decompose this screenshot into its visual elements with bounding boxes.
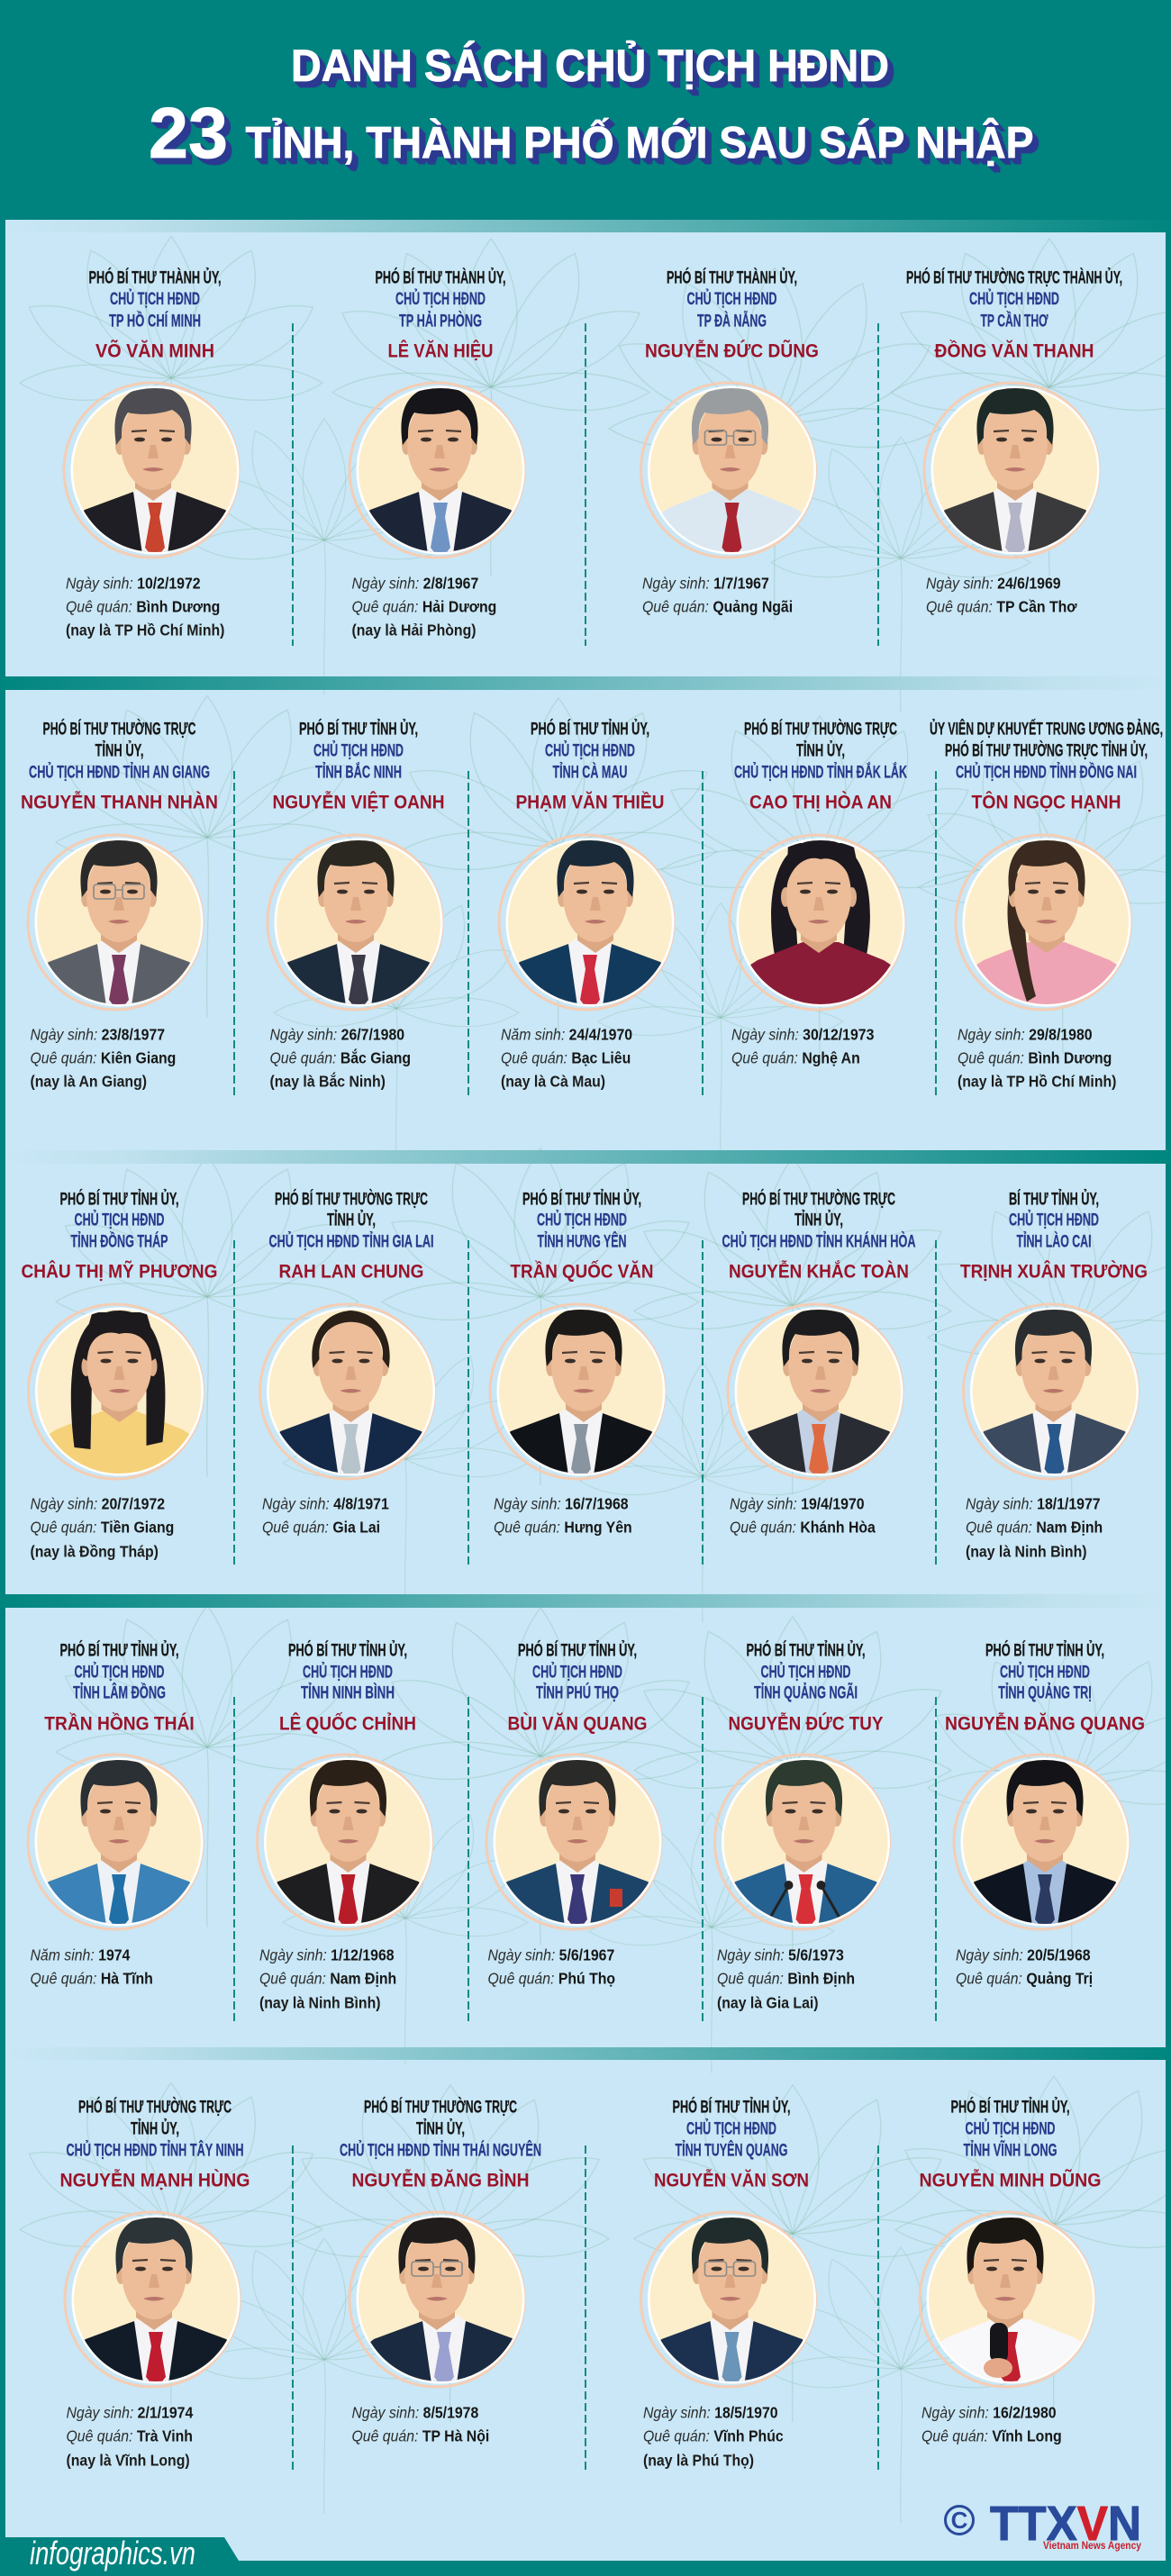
role: CHỦ TỊCH HĐND TỈNH TÂY NINH bbox=[67, 2140, 243, 2160]
role: CHỦ TỊCH HĐND bbox=[1000, 1663, 1090, 1683]
role: PHÓ BÍ THƯ TỈNH ỦY, bbox=[59, 1641, 178, 1661]
name: TRẦN HỒNG THÁI bbox=[44, 1713, 195, 1735]
role: CHỦ TỊCH HĐND bbox=[74, 1663, 164, 1683]
details: Năm sinh: 24/4/1970 bbox=[501, 1026, 632, 1044]
portrait bbox=[955, 834, 1131, 1011]
portrait bbox=[27, 1753, 204, 1931]
details: Quê quán: Bình Dương bbox=[958, 1049, 1112, 1067]
details: Quê quán: TP Cần Thơ bbox=[926, 598, 1077, 616]
role: TỈNH ỦY, bbox=[327, 1211, 376, 1230]
role: PHÓ BÍ THƯ THƯỜNG TRỰC bbox=[742, 1189, 895, 1209]
card: Nguyễn Mạnh Hùng bbox=[57, 2097, 255, 2470]
details: Quê quán: Hải Dương bbox=[351, 598, 496, 616]
details: Ngày sinh: 8/5/1978 bbox=[351, 2404, 478, 2422]
details: Ngày sinh: 29/8/1980 bbox=[958, 1026, 1093, 1044]
card: Nguyễn Đức Dũng bbox=[632, 268, 831, 616]
name: RAH LAN CHUNG bbox=[279, 1261, 423, 1283]
role bbox=[67, 2097, 243, 2160]
name: LÊ QUỐC CHỈNH bbox=[279, 1713, 416, 1735]
name: NGUYỄN ĐỨC TUY bbox=[728, 1713, 883, 1735]
role: PHÓ BÍ THƯ THƯỜNG TRỰC bbox=[275, 1189, 428, 1209]
portrait bbox=[256, 1753, 433, 1931]
details bbox=[270, 1026, 411, 1091]
role bbox=[340, 2097, 541, 2160]
role: TỈNH CÀ MAU bbox=[553, 762, 627, 782]
role bbox=[951, 2097, 1070, 2160]
role: PHÓ BÍ THƯ THÀNH ỦY, bbox=[667, 268, 797, 288]
details bbox=[966, 1495, 1103, 1561]
role bbox=[268, 1189, 434, 1252]
role bbox=[734, 719, 907, 782]
role: CHỦ TỊCH HĐND bbox=[969, 289, 1059, 309]
role: CHỦ TỊCH HĐND bbox=[686, 2118, 776, 2138]
details: Quê quán: Bình Dương bbox=[66, 598, 220, 616]
details bbox=[643, 2404, 784, 2470]
name: VÕ VĂN MINH bbox=[95, 340, 214, 362]
role bbox=[667, 268, 797, 331]
role: PHÓ BÍ THƯ TỈNH ỦY, bbox=[531, 719, 649, 739]
card: Nguyễn Văn Sơn bbox=[632, 2097, 831, 2470]
role: CHỦ TỊCH HĐND bbox=[545, 740, 635, 760]
role bbox=[522, 1189, 641, 1252]
details: Quê quán: Nam Định bbox=[259, 1970, 396, 1988]
portrait bbox=[27, 834, 204, 1011]
portrait bbox=[57, 2212, 255, 2399]
name: CAO THỊ HÒA AN bbox=[749, 791, 892, 812]
role bbox=[88, 268, 222, 331]
details: Quê quán: Quảng Trị bbox=[956, 1970, 1093, 1988]
name: TRẦN QUỐC VĂN bbox=[510, 1261, 654, 1283]
section divider bars bbox=[0, 220, 1171, 2060]
card: Đồng Văn Thanh bbox=[906, 268, 1122, 616]
role: TP ĐÀ NẴNG bbox=[697, 312, 767, 331]
portrait bbox=[267, 834, 443, 1011]
role bbox=[531, 719, 649, 782]
details: Ngày sinh: 30/12/1973 bbox=[731, 1026, 874, 1044]
role: TP HỒ CHÍ MINH bbox=[109, 312, 201, 331]
details: Quê quán: Bạc Liêu bbox=[501, 1049, 631, 1067]
role: TỈNH LÂM ĐỒNG bbox=[73, 1683, 166, 1702]
role: TỈNH LÀO CAI bbox=[1016, 1232, 1092, 1252]
role: TỈNH ỦY, bbox=[794, 1211, 843, 1230]
details: Quê quán: Gia Lai bbox=[262, 1519, 380, 1537]
name: NGUYỄN VĂN SƠN bbox=[654, 2171, 809, 2191]
details: Quê quán: Phú Thọ bbox=[488, 1970, 615, 1988]
details bbox=[717, 1946, 855, 2012]
name: CHÂU THỊ MỸ PHƯƠNG bbox=[22, 1261, 218, 1283]
card: Nguyễn Thanh Nhàn bbox=[20, 719, 218, 1091]
details: Quê quán: Quảng Ngãi bbox=[642, 598, 793, 616]
role bbox=[288, 1641, 407, 1702]
portrait bbox=[632, 2212, 831, 2399]
details: Quê quán: Trà Vinh bbox=[67, 2427, 193, 2445]
title: 23 bbox=[149, 93, 228, 173]
portrait bbox=[726, 1302, 904, 1481]
details: Quê quán: Kiên Giang bbox=[31, 1049, 176, 1067]
title: DANH SÁCH CHỦ TỊCH HĐND bbox=[291, 40, 889, 91]
role: TỈNH ỦY, bbox=[95, 740, 144, 760]
role: CHỦ TỊCH HĐND TỈNH ĐẮK LẮK bbox=[734, 762, 907, 782]
portrait bbox=[640, 382, 817, 558]
role bbox=[299, 719, 418, 782]
role: TỈNH QUẢNG NGÃI bbox=[754, 1683, 858, 1702]
details: Ngày sinh: 16/7/1968 bbox=[494, 1495, 629, 1513]
card: Phạm Văn Thiểu bbox=[497, 719, 676, 1090]
portrait bbox=[63, 382, 240, 558]
portrait bbox=[348, 382, 526, 558]
details: Ngày sinh: 10/2/1972 bbox=[66, 575, 201, 593]
role: CHỦ TỊCH HĐND bbox=[537, 1211, 627, 1230]
details bbox=[956, 1946, 1093, 1988]
role: TỈNH ỦY, bbox=[796, 740, 845, 760]
role: CHỦ TỊCH HĐND bbox=[966, 2118, 1056, 2138]
details: Quê quán: Bình Định bbox=[717, 1970, 855, 1988]
details bbox=[259, 1946, 396, 2012]
logo: TTXVN: C bbox=[951, 2507, 968, 2534]
name: BÙI VĂN QUANG bbox=[508, 1713, 647, 1735]
role: PHÓ BÍ THƯ TỈNH ỦY, bbox=[672, 2097, 791, 2117]
portrait bbox=[962, 1302, 1139, 1481]
role: TỈNH BẮC NINH bbox=[315, 762, 402, 782]
role: PHÓ BÍ THƯ TỈNH ỦY, bbox=[746, 1641, 865, 1661]
details bbox=[31, 1495, 174, 1561]
card: Nguyễn Minh Dũng bbox=[912, 2097, 1110, 2445]
card: Tôn Ngọc Hạnh bbox=[930, 719, 1163, 1091]
details bbox=[262, 1495, 389, 1537]
card: Nguyễn Đức Tuy bbox=[713, 1639, 891, 2011]
details: Quê quán: Vĩnh Long bbox=[921, 2427, 1062, 2445]
details: Ngày sinh: 18/5/1970 bbox=[643, 2404, 778, 2422]
details: (nay là Đồng Tháp) bbox=[31, 1543, 159, 1561]
portrait bbox=[713, 1753, 891, 1931]
role: PHÓ BÍ THƯ TỈNH ỦY, bbox=[299, 719, 418, 739]
portrait bbox=[27, 1302, 204, 1481]
role: CHỦ TỊCH HĐND bbox=[313, 740, 404, 760]
details: Quê quán: Hưng Yên bbox=[494, 1519, 632, 1537]
portrait bbox=[953, 1753, 1130, 1931]
name: NGUYỄN ĐĂNG QUANG bbox=[945, 1713, 1145, 1735]
details: (nay là Vĩnh Long) bbox=[67, 2452, 190, 2470]
details: (nay là Ninh Bình) bbox=[259, 1994, 381, 2012]
details: Quê quán: Bắc Giang bbox=[270, 1049, 411, 1067]
footer tab: infographics.vn: infographics.vn bbox=[30, 2535, 195, 2571]
role: CHỦ TỊCH HĐND bbox=[686, 289, 776, 309]
card: Nguyễn Đăng Bình bbox=[340, 2097, 543, 2445]
role: PHÓ BÍ THƯ THƯỜNG TRỰC bbox=[744, 719, 897, 739]
details: Quê quán: Khánh Hòa bbox=[730, 1519, 876, 1537]
details bbox=[31, 1946, 153, 1988]
dashed column separators bbox=[234, 323, 936, 2470]
details: Ngày sinh: 1/7/1967 bbox=[642, 575, 769, 593]
details bbox=[66, 575, 224, 639]
name: LÊ VĂN HIỆU bbox=[387, 340, 494, 362]
title: TỈNH, THÀNH PHỐ MỚI SAU SÁP NHẬP bbox=[245, 118, 1034, 168]
role: PHÓ BÍ THƯ THƯỜNG TRỰC bbox=[78, 2097, 231, 2117]
role: TỈNH QUẢNG TRỊ bbox=[998, 1683, 1092, 1702]
details bbox=[730, 1495, 876, 1537]
portrait bbox=[922, 382, 1101, 558]
role: CHỦ TỊCH HĐND TỈNH KHÁNH HÒA bbox=[722, 1232, 916, 1252]
details: Ngày sinh: 5/6/1973 bbox=[717, 1946, 844, 1964]
name: NGUYỄN MINH DŨNG bbox=[919, 2169, 1101, 2191]
details bbox=[31, 1026, 176, 1091]
details: Ngày sinh: 23/8/1977 bbox=[31, 1026, 165, 1044]
role bbox=[59, 1189, 178, 1252]
card: Nguyễn Đăng Quang bbox=[945, 1641, 1145, 1988]
role: TỈNH TUYÊN QUANG bbox=[676, 2140, 787, 2160]
details: (nay là TP Hồ Chí Minh) bbox=[66, 621, 224, 639]
role bbox=[906, 268, 1122, 331]
role bbox=[985, 1641, 1104, 1702]
name: NGUYỄN MẠNH HÙNG bbox=[59, 2169, 250, 2191]
portrait bbox=[485, 1753, 663, 1931]
footer band bbox=[0, 2561, 1171, 2576]
role: TỈNH HƯNG YÊN bbox=[537, 1232, 627, 1252]
details bbox=[958, 1026, 1116, 1091]
role: PHÓ BÍ THƯ THƯỜNG TRỰC bbox=[364, 2097, 517, 2117]
details: Ngày sinh: 2/1/1974 bbox=[67, 2404, 194, 2422]
name: NGUYỄN KHẮC TOÀN bbox=[729, 1261, 909, 1283]
role: CHỦ TỊCH HĐND bbox=[532, 1663, 622, 1683]
card: Trần Hồng Thái bbox=[27, 1639, 204, 1987]
details bbox=[731, 1026, 874, 1067]
logo: TTXVN: Vietnam News Agency bbox=[1043, 2539, 1141, 2552]
role bbox=[375, 268, 506, 331]
details: (nay là TP Hồ Chí Minh) bbox=[958, 1073, 1116, 1091]
name: NGUYỄN VIỆT OANH bbox=[272, 791, 445, 812]
role: TỈNH ĐỒNG THÁP bbox=[70, 1232, 168, 1252]
role: CHỦ TỊCH HĐND bbox=[303, 1663, 393, 1683]
name: NGUYỄN ĐỨC DŨNG bbox=[645, 340, 819, 362]
card: Lê Văn Hiệu bbox=[348, 267, 526, 639]
role: PHÓ BÍ THƯ TỈNH ỦY, bbox=[522, 1189, 641, 1209]
role bbox=[672, 2097, 791, 2160]
role: CHỦ TỊCH HĐND bbox=[110, 289, 200, 309]
details: (nay là Gia Lai) bbox=[717, 1994, 819, 2012]
role bbox=[59, 1641, 178, 1702]
role: PHÓ BÍ THƯ THÀNH ỦY, bbox=[88, 268, 222, 288]
name: TRỊNH XUÂN TRƯỜNG bbox=[960, 1261, 1148, 1283]
name: TÔN NGỌC HẠNH bbox=[971, 791, 1121, 812]
card: Võ Văn Minh bbox=[63, 267, 240, 639]
card: Trần Quốc Văn bbox=[488, 1189, 667, 1536]
role bbox=[930, 719, 1163, 782]
details: Ngày sinh: 16/2/1980 bbox=[921, 2404, 1057, 2422]
role: CHỦ TỊCH HĐND bbox=[1009, 1211, 1099, 1230]
name: ĐỒNG VĂN THANH bbox=[935, 340, 1094, 362]
role bbox=[1009, 1189, 1099, 1252]
details: (nay là Phú Thọ) bbox=[643, 2452, 754, 2470]
details: Ngày sinh: 4/8/1971 bbox=[262, 1495, 389, 1513]
details: Năm sinh: 1974 bbox=[31, 1946, 131, 1964]
details: Quê quán: Nghệ An bbox=[731, 1049, 860, 1067]
role: PHÓ BÍ THƯ THÀNH ỦY, bbox=[375, 268, 506, 288]
details: Quê quán: TP Hà Nội bbox=[351, 2427, 489, 2445]
role bbox=[29, 719, 210, 782]
portrait bbox=[497, 834, 676, 1011]
role: CHỦ TỊCH HĐND bbox=[74, 1211, 164, 1230]
role: PHÓ BÍ THƯ TỈNH ỦY, bbox=[59, 1189, 178, 1209]
role: TỈNH ỦY, bbox=[416, 2118, 465, 2138]
role bbox=[722, 1189, 916, 1252]
portrait bbox=[345, 2212, 543, 2399]
card: Châu Thị Mỹ Phương bbox=[20, 1189, 218, 1561]
role bbox=[746, 1641, 865, 1702]
details: Ngày sinh: 20/5/1968 bbox=[956, 1946, 1091, 1964]
card: Nguyễn Khắc Toàn bbox=[720, 1189, 918, 1537]
card: Rah Lan Chung bbox=[259, 1189, 436, 1536]
role: BÍ THƯ TỈNH ỦY, bbox=[1009, 1189, 1099, 1209]
role: CHỦ TỊCH HĐND TỈNH AN GIANG bbox=[29, 762, 210, 782]
portrait bbox=[259, 1302, 436, 1481]
role: TP CẦN THƠ bbox=[980, 312, 1048, 331]
details bbox=[67, 2404, 194, 2470]
details: Ngày sinh: 2/8/1967 bbox=[351, 575, 478, 593]
role: TỈNH ỦY, bbox=[131, 2118, 179, 2138]
details bbox=[642, 575, 793, 616]
details: Quê quán: Hà Tĩnh bbox=[31, 1970, 153, 1988]
details: Ngày sinh: 19/4/1970 bbox=[730, 1495, 865, 1513]
role bbox=[518, 1641, 637, 1702]
details: Ngày sinh: 1/12/1968 bbox=[259, 1946, 395, 1964]
role: TỈNH NINH BÌNH bbox=[301, 1683, 395, 1702]
details bbox=[926, 575, 1077, 616]
role: PHÓ BÍ THƯ TỈNH ỦY, bbox=[518, 1641, 637, 1661]
details: (nay là Cà Mau) bbox=[501, 1073, 605, 1091]
details: (nay là An Giang) bbox=[31, 1073, 147, 1091]
details bbox=[494, 1495, 632, 1537]
role: PHÓ BÍ THƯ TỈNH ỦY, bbox=[951, 2097, 1070, 2117]
details: Quê quán: Tiền Giang bbox=[31, 1519, 174, 1537]
card: Nguyễn Việt Oanh bbox=[267, 719, 443, 1090]
details: (nay là Hải Phòng) bbox=[351, 621, 477, 639]
card: Bùi Văn Quang bbox=[485, 1639, 663, 1987]
details: (nay là Ninh Bình) bbox=[966, 1543, 1087, 1561]
role: CHỦ TỊCH HĐND TỈNH THÁI NGUYÊN bbox=[340, 2140, 541, 2160]
details: Ngày sinh: 26/7/1980 bbox=[270, 1026, 404, 1044]
card: Cao Thị Hòa An bbox=[722, 719, 920, 1067]
portrait bbox=[728, 834, 906, 1011]
title bbox=[149, 40, 1034, 173]
details bbox=[351, 2404, 489, 2445]
details: Quê quán: Nam Định bbox=[966, 1519, 1103, 1537]
details: Ngày sinh: 20/7/1972 bbox=[31, 1495, 165, 1513]
portrait bbox=[912, 2212, 1110, 2399]
role: TP HẢI PHÒNG bbox=[399, 312, 482, 331]
logo: TTXVN: TTXVN bbox=[990, 2497, 1141, 2551]
name: NGUYỄN ĐĂNG BÌNH bbox=[351, 2171, 530, 2191]
role: TỈNH VĨNH LONG bbox=[964, 2140, 1058, 2160]
role: PHÓ BÍ THƯ TỈNH ỦY, bbox=[288, 1641, 407, 1661]
card: Trịnh Xuân Trường bbox=[955, 1189, 1153, 1561]
role: PHÓ BÍ THƯ THƯỜNG TRỰC bbox=[43, 719, 196, 739]
details: Ngày sinh: 18/1/1977 bbox=[966, 1495, 1101, 1513]
card: Lê Quốc Chỉnh bbox=[256, 1639, 433, 2011]
details: Ngày sinh: 5/6/1967 bbox=[488, 1946, 614, 1964]
details: Quê quán: Vĩnh Phúc bbox=[643, 2427, 784, 2445]
role: CHỦ TỊCH HĐND bbox=[395, 289, 486, 309]
details bbox=[488, 1946, 615, 1988]
name: PHẠM VĂN THIỀU bbox=[515, 793, 665, 812]
details bbox=[501, 1026, 632, 1091]
name: NGUYỄN THANH NHÀN bbox=[21, 793, 218, 812]
portrait bbox=[488, 1302, 667, 1481]
details bbox=[921, 2404, 1062, 2445]
details bbox=[351, 575, 496, 639]
details: Ngày sinh: 24/6/1969 bbox=[926, 575, 1061, 593]
role: PHÓ BÍ THƯ TỈNH ỦY, bbox=[985, 1641, 1104, 1661]
details: (nay là Bắc Ninh) bbox=[270, 1073, 386, 1091]
role: CHỦ TỊCH HĐND bbox=[760, 1663, 850, 1683]
role: CHỦ TỊCH HĐND TỈNH GIA LAI bbox=[268, 1232, 434, 1252]
role: TỈNH PHÚ THỌ bbox=[536, 1683, 619, 1702]
